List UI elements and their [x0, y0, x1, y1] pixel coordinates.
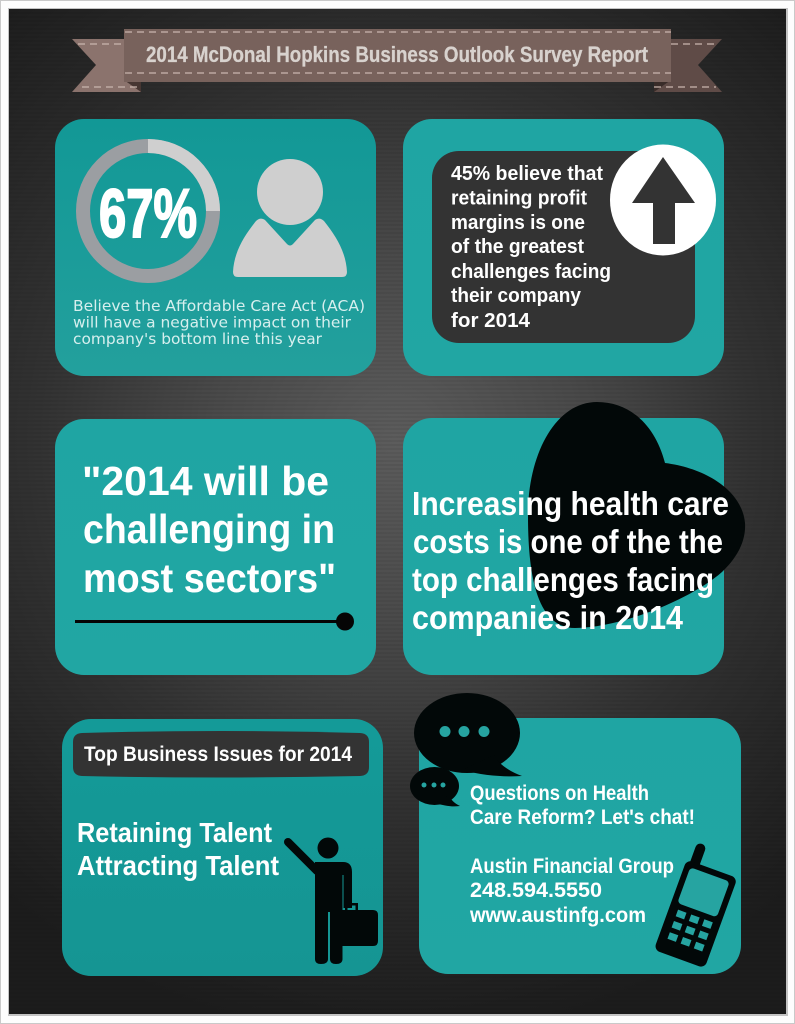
icon: black heart	[528, 402, 745, 628]
icon: mobile phone	[654, 841, 744, 968]
quote text: most sectors"	[83, 555, 336, 601]
profit margins statement: challenges facing	[451, 261, 611, 283]
heading bar: Top Business Issues for 2014	[84, 743, 352, 766]
health care statement: companies in 2014	[412, 599, 684, 636]
quote text	[82, 458, 336, 601]
ACA description: will have a negative impact on their	[73, 314, 352, 332]
ribbon right fold	[654, 80, 671, 92]
report title: 2014 McDonal Hopkins Business Outlook Survey Report	[146, 42, 649, 67]
profit margins statement: 45% believe that	[451, 163, 603, 185]
icon: person	[233, 159, 347, 277]
issues list: Attracting Talent	[77, 850, 279, 881]
quote text: "2014 will be	[82, 458, 329, 504]
health care statement	[412, 485, 729, 636]
ACA description: Believe the Affordable Care Act (ACA)	[73, 297, 365, 315]
ribbon right tail	[654, 39, 722, 92]
icon: traveller with briefcase	[288, 838, 378, 964]
panel: top business issues	[62, 719, 383, 976]
ACA description	[73, 297, 365, 348]
profit margins statement: their company	[451, 285, 582, 307]
panel: ACA impact	[55, 119, 376, 376]
issues list	[77, 817, 279, 881]
contact text: Questions on Health	[470, 782, 649, 805]
issues list: Retaining Talent	[77, 817, 272, 848]
ribbon main band	[124, 29, 671, 82]
panel: profit margins	[403, 119, 724, 376]
health care statement: top challenges facing	[412, 561, 714, 598]
health care statement: costs is one of the the	[413, 523, 723, 560]
profit margins statement: for 2014	[451, 310, 531, 332]
contact text: www.austinfg.com	[469, 904, 646, 927]
ribbon left tail	[72, 39, 141, 92]
icon: up arrow	[610, 144, 716, 256]
ribbon stitching	[78, 32, 718, 87]
profit margins statement: retaining profit	[451, 188, 587, 210]
panel: contact	[410, 693, 744, 974]
panel: quote	[55, 419, 376, 675]
ACA description: company's bottom line this year	[73, 330, 323, 348]
heading bar	[73, 731, 369, 778]
panel: health care costs	[403, 402, 745, 675]
donut chart: 67%	[83, 146, 213, 276]
ribbon left fold	[124, 80, 141, 92]
icon: small speech bubble	[410, 767, 460, 806]
contact text	[469, 782, 695, 927]
profit margins statement: margins is one	[451, 212, 585, 234]
profit margins statement	[451, 163, 611, 332]
contact text: 248.594.5550	[470, 879, 602, 902]
contact text: Austin Financial Group	[470, 855, 674, 878]
title ribbon	[72, 29, 722, 92]
quote rule with dot	[75, 612, 354, 630]
quote text: challenging in	[83, 506, 335, 552]
contact text: Care Reform? Let's chat!	[470, 806, 695, 829]
icon: large speech bubble	[414, 693, 522, 776]
dark text box	[432, 151, 695, 343]
profit margins statement: of the greatest	[451, 236, 584, 258]
health care statement: Increasing health care	[412, 485, 729, 522]
stat: 67%: 67%	[99, 175, 197, 252]
